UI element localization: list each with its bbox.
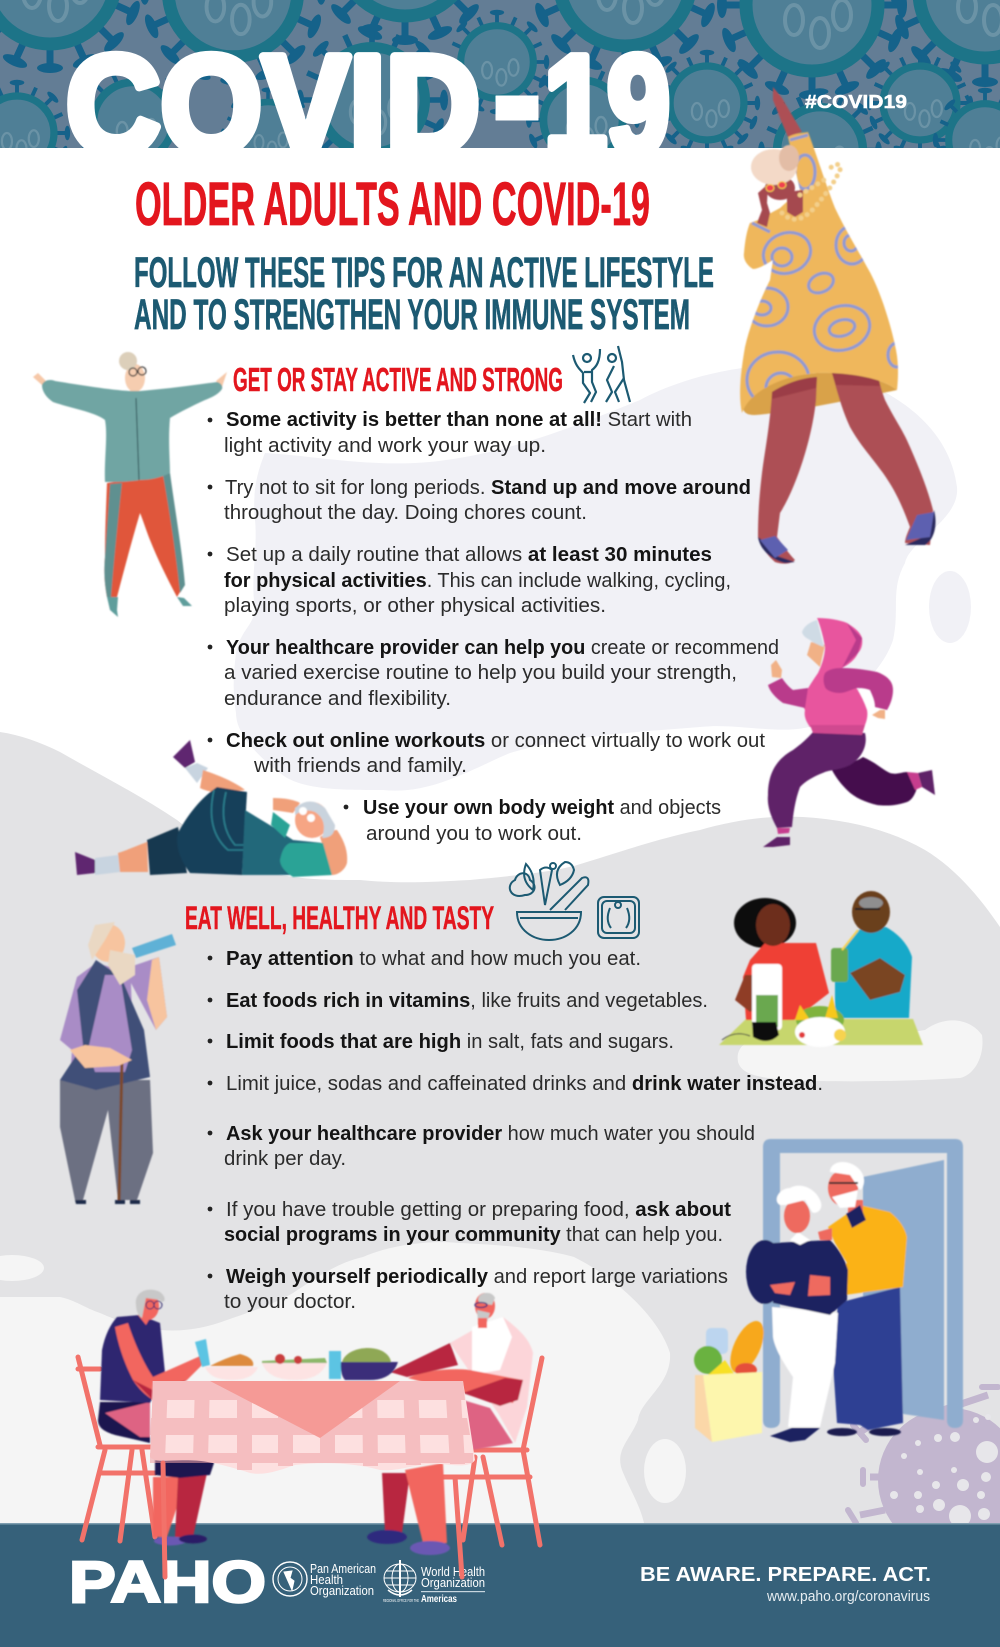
title: COVID-19: 19 — [544, 26, 670, 183]
tips: eat well: Limit juice, sodas and caffeinated drinks and drink water instead. — [226, 1073, 823, 1095]
title: COVID-19: COVID — [66, 26, 480, 183]
text: World Health Organization Americas: Organization — [421, 1575, 485, 1590]
tips: eat well: Pay attention to what and how much you eat. — [226, 948, 641, 970]
tips: eat well: Limit foods that are high in salt, fats and sugars. — [226, 1031, 674, 1053]
tips: get or stay active: Use your own body weight and objects — [363, 797, 721, 819]
illustration: couple making juice — [719, 891, 923, 1047]
tips: get or stay active: Try not to sit for long periods. Stand up and move around — [225, 477, 751, 499]
tips: get or stay active: around you to work out. — [366, 823, 582, 845]
text: Pan American Health Organization: Health — [310, 1573, 343, 1587]
subheading: follow these tips — [134, 249, 714, 339]
tips: get or stay active: throughout the day. Doing chores count. — [224, 502, 587, 524]
text: Pan American Health Organization: Pan American — [310, 1562, 376, 1576]
icon: exercising people — [573, 346, 630, 403]
logo: PAHO seal — [273, 1562, 307, 1596]
title: COVID-19 — [67, 50, 670, 148]
illustration: jogging woman in pink hoodie — [763, 618, 935, 847]
tips: get or stay active: Set up a daily routine that allows at least 30 minutes — [226, 544, 712, 566]
tips: get or stay active: endurance and flexibility. — [224, 688, 451, 710]
logo: PAHO wordmark: PAHO — [69, 1550, 266, 1615]
front chair legs — [163, 1463, 462, 1577]
slogan: BE AWARE. PREPARE. ACT. — [640, 1563, 931, 1586]
tips: eat well: social programs in your community that can help you. — [224, 1224, 723, 1246]
tips: get or stay active: Your healthcare provider can help you create or recommend — [226, 637, 779, 659]
table food — [195, 1339, 398, 1380]
tips: eat well: Weigh yourself periodically and report large variations — [226, 1266, 728, 1288]
illustration: stretching woman — [33, 352, 227, 617]
tips: get or stay active: Some activity is better than none at all! Start with — [226, 409, 692, 431]
footer band — [0, 1523, 1000, 1647]
text: Pan American Health Organization: Organization — [310, 1584, 374, 1598]
tips: eat well — [208, 948, 823, 1313]
right chair — [443, 1358, 542, 1545]
checkered tablecloth — [150, 1381, 475, 1474]
text: World Health Organization Americas — [383, 1564, 485, 1605]
icon: salad bowl — [510, 862, 588, 940]
text: Pan American Health Organization — [310, 1562, 376, 1598]
illustration: dancing woman in yellow dress — [740, 87, 936, 564]
tips: eat well: Ask your healthcare provider how much water you should — [226, 1123, 755, 1145]
header banner with virus pattern — [0, 0, 1000, 148]
tips: get or stay active — [208, 409, 779, 845]
hashtag: #COVID19 — [805, 91, 907, 112]
tips: get or stay active: a varied exercise routine to help you build your strength, — [224, 662, 737, 684]
tips: get or stay active: Check out online workouts or connect virtually to work out — [226, 730, 765, 752]
icon: bathroom scale — [598, 897, 639, 938]
tips: get or stay active: with friends and family. — [253, 755, 467, 777]
right diner — [367, 1293, 533, 1555]
illustration: purple virus — [845, 1384, 1000, 1523]
tips: get or stay active: light activity and work your way up. — [224, 435, 546, 457]
logo: WHO emblem — [384, 1560, 416, 1597]
text: World Health Organization Americas: REGIONAL OFFICE FOR THE — [383, 1598, 419, 1603]
illustration: couple at doorway — [694, 1139, 963, 1442]
tips: eat well: to your doctor. — [224, 1291, 356, 1313]
illustration: man exercising on floor — [75, 740, 347, 877]
tips: get or stay active: playing sports, or other physical activities. — [224, 595, 606, 617]
url: www.paho.org/coronavirus — [766, 1589, 930, 1605]
illustration: couple at dinner table — [78, 1290, 542, 1577]
section heading: get or stay active: GET OR STAY ACTIVE AND STRONG — [233, 361, 563, 398]
text: World Health Organization Americas: World Health — [421, 1564, 485, 1579]
tips: eat well: If you have trouble getting or preparing food, ask about — [226, 1199, 731, 1221]
text: World Health Organization Americas: Americas — [421, 1594, 457, 1605]
illustration: older man drinking water — [60, 922, 176, 1204]
left chair — [78, 1357, 155, 1541]
left diner — [98, 1290, 215, 1546]
tips: get or stay active: for physical activities. This can include walking, cycling, — [224, 570, 731, 592]
tips: eat well: drink per day. — [224, 1148, 346, 1170]
tips: eat well: Eat foods rich in vitamins, like fruits and vegetables. — [226, 990, 708, 1012]
section heading: eat well: EAT WELL, HEALTHY AND TASTY — [185, 900, 494, 936]
